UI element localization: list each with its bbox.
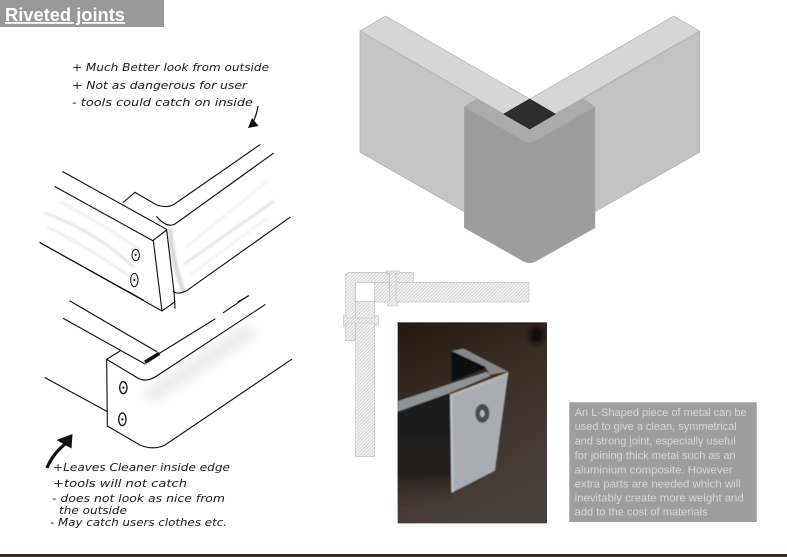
handwritten notes: top sketch: - tools could catch on inside: [72, 96, 253, 109]
top edge of plate: [398, 372, 491, 412]
handwritten notes: lower sketch: +tools will not catch: [53, 477, 187, 490]
handwritten notes: lower sketch: - does not look as nice from: [52, 492, 225, 505]
sketch: outside-facing bracket joint: [40, 145, 290, 311]
description text panel: for joining thick metal such as an: [575, 450, 736, 462]
rivet: upper: [120, 382, 127, 394]
rivet: upper: [132, 249, 139, 261]
top bolt: [386, 271, 400, 306]
arrow: pointing down to top sketch: [248, 106, 258, 128]
description text panel: aluminium composite. However: [575, 464, 733, 476]
handwritten notes: top sketch: + Not as dangerous for user: [72, 79, 249, 92]
title: Riveted joints: [5, 5, 125, 25]
horizontal plate: [374, 282, 529, 302]
inner plate: [452, 352, 487, 382]
handwritten notes: lower sketch: the outside: [59, 504, 127, 517]
description text panel: An L-Shaped piece of metal can be: [575, 407, 747, 419]
left plate top face: [360, 16, 530, 114]
bracket top face: [464, 99, 595, 142]
right plate side face: [583, 31, 700, 212]
sketch: inside-facing bracket joint: [45, 296, 292, 448]
description text panel: used to give a clean, symmetrical: [575, 421, 737, 433]
handwritten notes: lower sketch: [50, 461, 230, 529]
left plate side face: [360, 31, 504, 212]
isometric 3D render of joint: [360, 16, 700, 263]
handwritten notes: lower sketch: +Leaves Cleaner inside edge: [53, 461, 230, 474]
vertical plate: [356, 302, 375, 457]
rivet: lower: [119, 413, 126, 426]
description text panel: and strong joint, especially useful: [575, 435, 736, 447]
bracket front face: [464, 107, 595, 263]
arrow: pointing up to lower sketch: [47, 434, 72, 468]
section drawing with hatching: [344, 271, 529, 457]
hollow corner: [504, 99, 555, 129]
title: [0, 0, 164, 27]
dark plate: [398, 393, 451, 507]
L bracket section: [346, 272, 413, 341]
description text panel: inevitably create more weight and: [575, 493, 744, 505]
top edge of inner plate: [452, 348, 508, 375]
handwritten notes: top sketch: [72, 61, 269, 109]
bottom dark strip: [0, 554, 787, 557]
rivet: [475, 404, 489, 423]
handwritten notes: lower sketch: - May catch users clothes etc.: [50, 516, 227, 529]
right plate top face: [530, 16, 700, 114]
rivet: lower: [131, 273, 138, 287]
description text panel: extra parts are needed which will: [575, 479, 741, 491]
left bolt: [344, 315, 378, 326]
photo of riveted L-bracket: [398, 322, 547, 523]
description text panel: [569, 402, 757, 522]
description text panel: add to the cost of materials: [575, 507, 708, 519]
handwritten notes: top sketch: + Much Better look from outside: [72, 61, 269, 74]
bracket face: [450, 373, 508, 493]
